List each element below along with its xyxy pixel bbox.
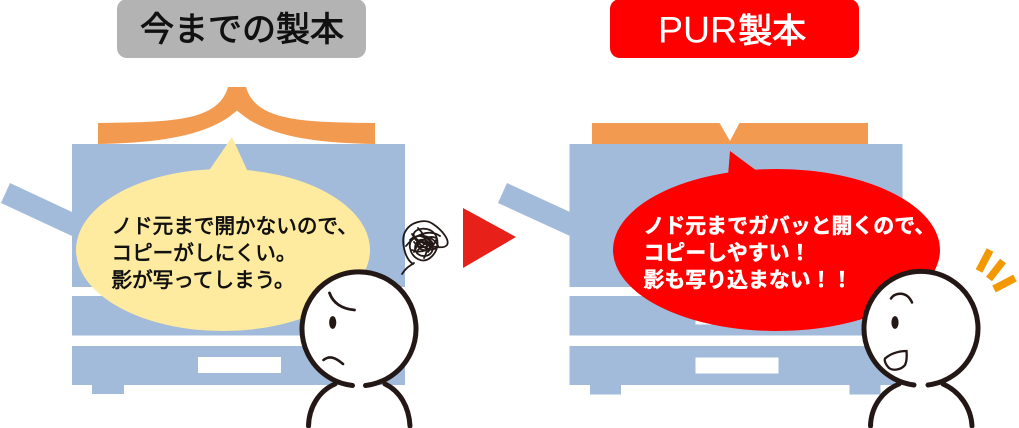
icon: flat open book, PUR	[592, 123, 868, 144]
icon: opened book, conventional	[98, 87, 375, 144]
arrow: red triangle	[463, 208, 516, 268]
callout: right speech bubble: 影も写り込まない！！	[644, 269, 852, 292]
icon: left worried person	[302, 272, 416, 428]
heading: conventional binding	[117, 0, 366, 58]
callout: left speech bubble: コピーがしにくい。	[112, 242, 296, 265]
heading: conventional binding: 今までの製本	[140, 11, 344, 49]
panel: right copier	[498, 144, 902, 394]
callout: right speech bubble: ノド元までガバッと開くので、	[644, 215, 935, 238]
callout: right speech bubble: コピーしやすい！	[644, 242, 810, 265]
icon: scribble worry	[402, 221, 448, 274]
icon: right happy person	[864, 271, 978, 428]
icon: orange emphasis lines	[979, 250, 1015, 289]
panel: left copier	[1, 144, 405, 394]
callout: left speech bubble	[76, 137, 370, 331]
callout: left speech bubble: 影が写ってしまう。	[112, 269, 295, 292]
heading: PUR binding	[610, 0, 859, 58]
callout: left speech bubble: ノド元まで開かないので、	[112, 215, 358, 238]
callout: right speech bubble	[613, 151, 941, 331]
heading: PUR binding: PUR製本	[658, 8, 806, 50]
